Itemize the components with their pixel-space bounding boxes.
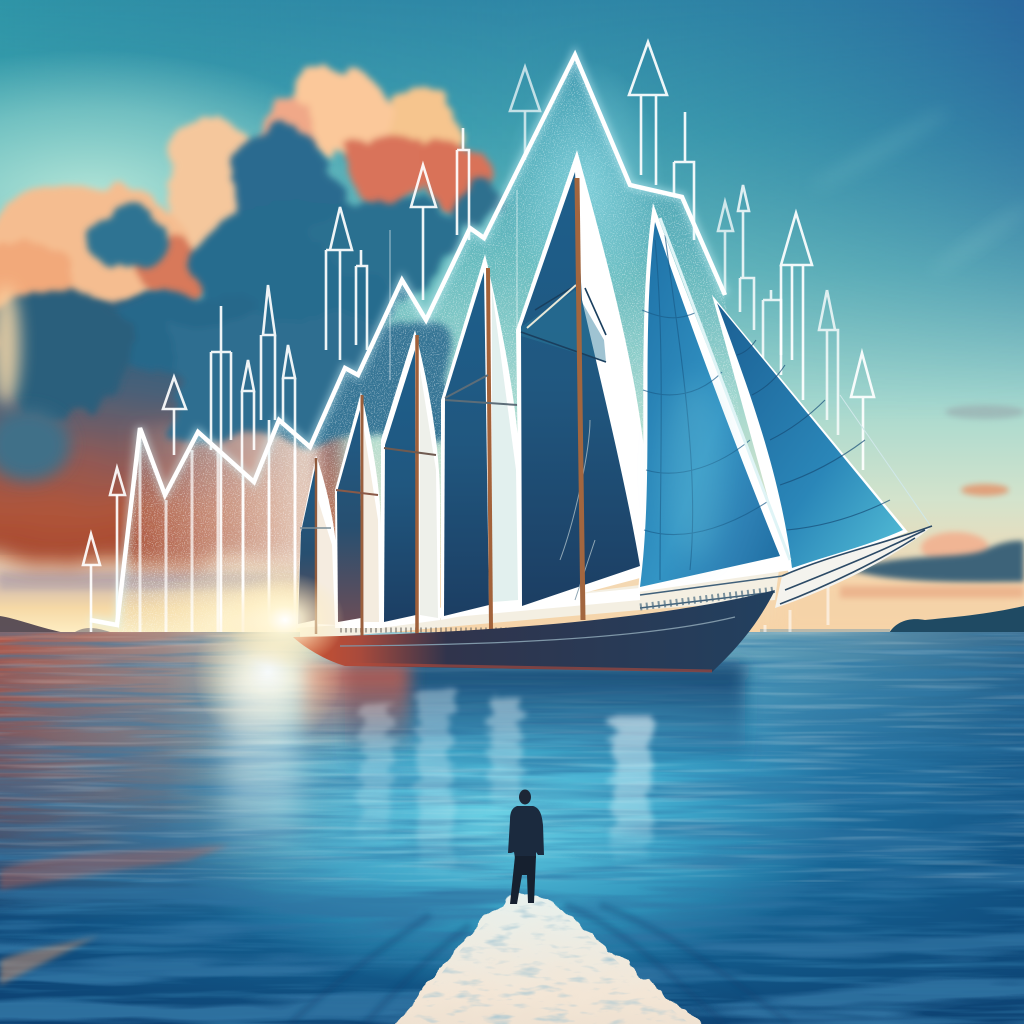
sail: large fore sail bbox=[638, 203, 792, 592]
arrow 13 bbox=[629, 42, 667, 185]
dark blue cloud masses bbox=[0, 124, 494, 440]
arrow 1 bbox=[83, 534, 100, 650]
chart line bbox=[90, 55, 725, 625]
wake swells bbox=[290, 905, 790, 1024]
low red storm bank bbox=[0, 280, 340, 565]
arrow 20 bbox=[851, 353, 874, 470]
bar arrow 17 bbox=[763, 290, 781, 360]
bar arrow 7 bbox=[283, 345, 295, 640]
rising arrows bbox=[83, 42, 874, 650]
arrow 12 bbox=[510, 67, 540, 160]
sail: main mast bbox=[516, 150, 650, 620]
arrow 2 bbox=[110, 468, 125, 625]
man standing bbox=[508, 790, 544, 904]
jacket bbox=[508, 806, 544, 858]
arrow 3 bbox=[163, 377, 186, 455]
speckled chart area bbox=[117, 55, 740, 640]
arrow 19 bbox=[819, 290, 838, 435]
chart line glow bbox=[90, 55, 725, 625]
arrow 10 bbox=[411, 165, 436, 300]
sky background bbox=[0, 0, 1024, 640]
pale fade of the storm bank bbox=[130, 425, 320, 570]
vertical light streaks below the chart bbox=[140, 190, 828, 690]
cloud highlights bbox=[0, 409, 70, 481]
arrow 15 bbox=[718, 202, 733, 295]
wake path bbox=[290, 894, 790, 1024]
water bbox=[0, 632, 1024, 1024]
arrow 18 bbox=[781, 213, 812, 400]
right side distant clouds bbox=[840, 405, 1024, 598]
arrow 16 bbox=[738, 185, 754, 330]
bar arrow 4 bbox=[211, 306, 231, 640]
legs bbox=[510, 856, 536, 904]
sail: jib bbox=[660, 218, 908, 578]
sun glare bbox=[130, 560, 410, 690]
sail: fourth mast bbox=[441, 254, 521, 630]
sail: third mast bbox=[381, 330, 440, 636]
bar arrow 11 bbox=[457, 128, 469, 240]
bar arrow 5 bbox=[242, 360, 254, 640]
hull bbox=[293, 590, 775, 672]
horizon glow bbox=[0, 555, 1024, 637]
sailing ship bbox=[293, 150, 932, 672]
ship reflection bbox=[0, 597, 745, 985]
sail: second mast bbox=[335, 392, 381, 636]
bar arrow 9 bbox=[356, 250, 367, 350]
bowsprit bbox=[775, 395, 932, 608]
peach cloud tops bbox=[0, 62, 488, 350]
bar arrow 14 bbox=[674, 112, 694, 240]
storm clouds left bbox=[0, 62, 494, 570]
sun glare over the ship stern bbox=[225, 572, 345, 668]
sail: stern mast bbox=[297, 455, 338, 634]
bar arrow 6 bbox=[261, 285, 275, 640]
deck and rail bbox=[300, 562, 790, 640]
distant islands bbox=[0, 606, 1024, 636]
foam bbox=[392, 894, 702, 1024]
arrow 8 bbox=[326, 207, 352, 360]
foam texture bbox=[400, 899, 690, 1024]
head bbox=[519, 790, 531, 804]
